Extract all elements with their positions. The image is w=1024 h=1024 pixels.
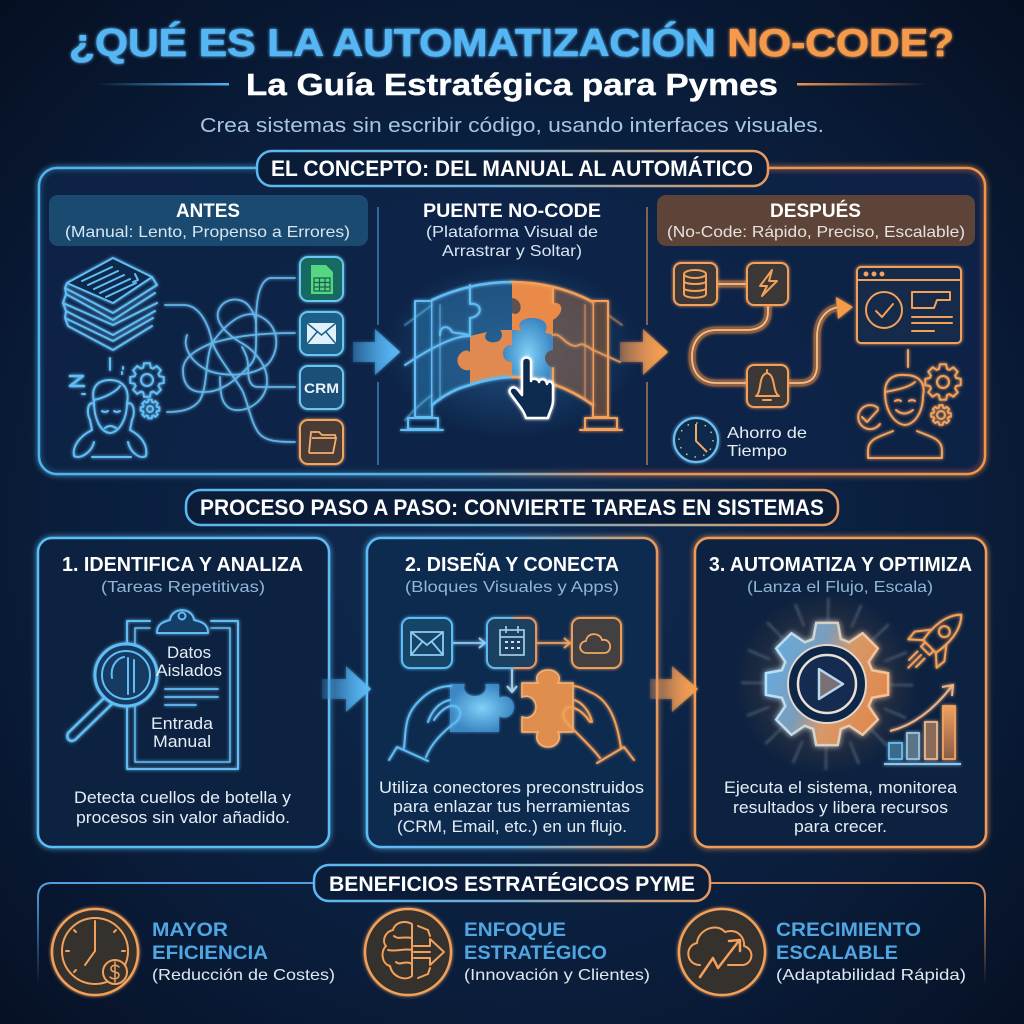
step 3 heading: (Lanza el Flujo, Escala) xyxy=(747,579,933,596)
step 1 text xyxy=(74,789,292,827)
icon: clipboard with magnifier: Aislados xyxy=(156,662,222,680)
right post xyxy=(580,301,622,430)
icon: right hand xyxy=(563,686,634,763)
header: antes: (Manual: Lento, Propenso a Errores) xyxy=(65,224,350,241)
icon: paper stack xyxy=(63,258,157,350)
icon: CRM xyxy=(300,366,343,409)
step 1 text: Detecta cuellos de botella y xyxy=(74,789,292,807)
icon: left hand xyxy=(389,686,460,761)
arrow: to after xyxy=(620,329,668,375)
icon: stressed person xyxy=(70,358,146,457)
left post xyxy=(401,301,443,430)
step 3 text: para crecer. xyxy=(794,818,887,836)
happy person with gears xyxy=(858,350,961,458)
subtitle with side rules: La Guía Estratégica para Pymes xyxy=(246,67,778,102)
icon: clock and coin xyxy=(52,909,138,995)
benefit 1 text: EFICIENCIA xyxy=(152,942,268,964)
section heading: concept: EL CONCEPTO: DEL MANUAL AL AUTOMÁTICO xyxy=(271,156,753,181)
benefit 2 text: ENFOQUE xyxy=(464,919,566,941)
icon: bell xyxy=(747,365,788,407)
step 2 heading: (Bloques Visuales y Apps) xyxy=(405,579,619,596)
icon: clock xyxy=(674,418,718,462)
icon: lightning xyxy=(747,263,788,305)
icon: cloud growth xyxy=(679,909,765,995)
puzzle piece: orange lower xyxy=(457,330,512,385)
arrow: to bridge xyxy=(353,329,400,375)
illustration: puzzle bridge xyxy=(382,260,642,440)
step 3 heading: 3. AUTOMATIZA Y OPTIMIZA xyxy=(709,554,972,576)
icon: email xyxy=(300,312,343,355)
benefit 3 text xyxy=(776,919,966,984)
benefit 1 text: (Reducción de Costes) xyxy=(152,967,335,984)
benefit 3 text: (Adaptabilidad Rápida) xyxy=(776,967,966,984)
icon: gears xyxy=(130,363,164,418)
title: ¿QUÉ ES LA AUTOMATIZACIÓN NO-CODE? xyxy=(69,21,954,65)
benefit 1 text xyxy=(152,919,335,984)
step 3 text xyxy=(724,779,958,836)
flow connector xyxy=(692,284,853,383)
section heading: benefits: BENEFICIOS ESTRATÉGICOS PYME xyxy=(329,873,695,896)
panel: concept xyxy=(39,151,985,474)
header: bridge: (Plataforma Visual de xyxy=(426,224,598,241)
icon: clipboard with magnifier: Entrada xyxy=(151,715,214,733)
benefit 2 text: ESTRATÉGICO xyxy=(464,941,607,964)
step 2 text: para enlazar tus herramientas xyxy=(393,798,630,816)
benefit 2 text xyxy=(464,919,650,984)
section heading: concept xyxy=(257,151,768,186)
label: time saving xyxy=(727,425,807,460)
header: antes xyxy=(49,195,368,246)
icon: rocket xyxy=(893,600,976,683)
step 1 heading: (Tareas Repetitivas) xyxy=(101,579,265,596)
benefit 3 text: ESCALABLE xyxy=(776,942,898,964)
chart: growth bars xyxy=(884,685,961,764)
benefit 1 text: MAYOR xyxy=(152,919,228,941)
label: time saving: Tiempo xyxy=(727,443,787,460)
tagline: Crea sistemas sin escribir código, usando interfaces visuales. xyxy=(200,115,824,137)
icon: pointing hand xyxy=(510,358,553,418)
step 1 text: procesos sin valor añadido. xyxy=(76,809,290,827)
section heading: benefits xyxy=(314,865,710,901)
puzzle piece: blue centre xyxy=(503,318,553,390)
arrow: step 2 to 3 xyxy=(650,666,698,712)
puzzle piece: orange top xyxy=(512,282,561,335)
icon: clipboard with magnifier xyxy=(67,610,238,769)
panel: benefits xyxy=(38,865,985,995)
app flow xyxy=(402,618,621,692)
section heading: process: PROCESO PASO A PASO: CONVIERTE TAREAS EN SISTEMAS xyxy=(200,495,824,520)
step 2 text xyxy=(379,779,644,836)
header: bridge: Arrastrar y Soltar) xyxy=(442,243,582,260)
step 3 text: Ejecuta el sistema, monitorea xyxy=(724,779,958,797)
puzzle piece: blue xyxy=(450,684,514,732)
arrow: step 1 to 2 xyxy=(322,666,371,712)
icon: gear with play button xyxy=(735,592,919,776)
icon: dashboard window xyxy=(857,267,961,343)
header: despues: DESPUÉS xyxy=(770,200,861,222)
icon: CRM: CRM xyxy=(304,380,339,396)
header: bridge xyxy=(423,201,601,260)
header: bridge: PUENTE NO-CODE xyxy=(423,201,601,222)
icon: clipboard with magnifier: Manual xyxy=(153,733,211,751)
step 2 text: (CRM, Email, etc.) en un flujo. xyxy=(397,818,627,836)
header: despues: (No-Code: Rápido, Preciso, Escalable) xyxy=(667,224,965,241)
panel: step 2 xyxy=(367,538,657,847)
panel: step 1 xyxy=(38,538,329,847)
step 1 heading xyxy=(62,554,303,596)
icon: brain and arrow xyxy=(365,909,451,995)
tangled wires xyxy=(165,278,295,442)
icon: database xyxy=(674,263,717,305)
section heading: process xyxy=(186,490,838,525)
icon: folder xyxy=(300,420,343,464)
header: despues xyxy=(657,195,975,246)
step 1 heading: 1. IDENTIFICA Y ANALIZA xyxy=(62,554,303,576)
header: antes: ANTES xyxy=(176,201,240,222)
step 2 text: Utiliza conectores preconstruidos xyxy=(379,779,644,797)
icon: spreadsheet xyxy=(300,257,343,301)
puzzle piece: orange xyxy=(522,670,573,747)
benefit 2 text: (Innovación y Clientes) xyxy=(464,967,650,984)
label: time saving: Ahorro de xyxy=(727,425,807,442)
step 2 heading: 2. DISEÑA Y CONECTA xyxy=(405,553,619,576)
step 3 heading xyxy=(709,554,972,596)
benefit 3 text: CRECIMIENTO xyxy=(776,919,921,941)
step 2 heading xyxy=(405,553,619,596)
icon: clipboard with magnifier: Datos xyxy=(167,644,211,662)
step 3 text: resultados y libera recursos xyxy=(733,799,948,817)
panel: step 3 xyxy=(695,538,986,847)
